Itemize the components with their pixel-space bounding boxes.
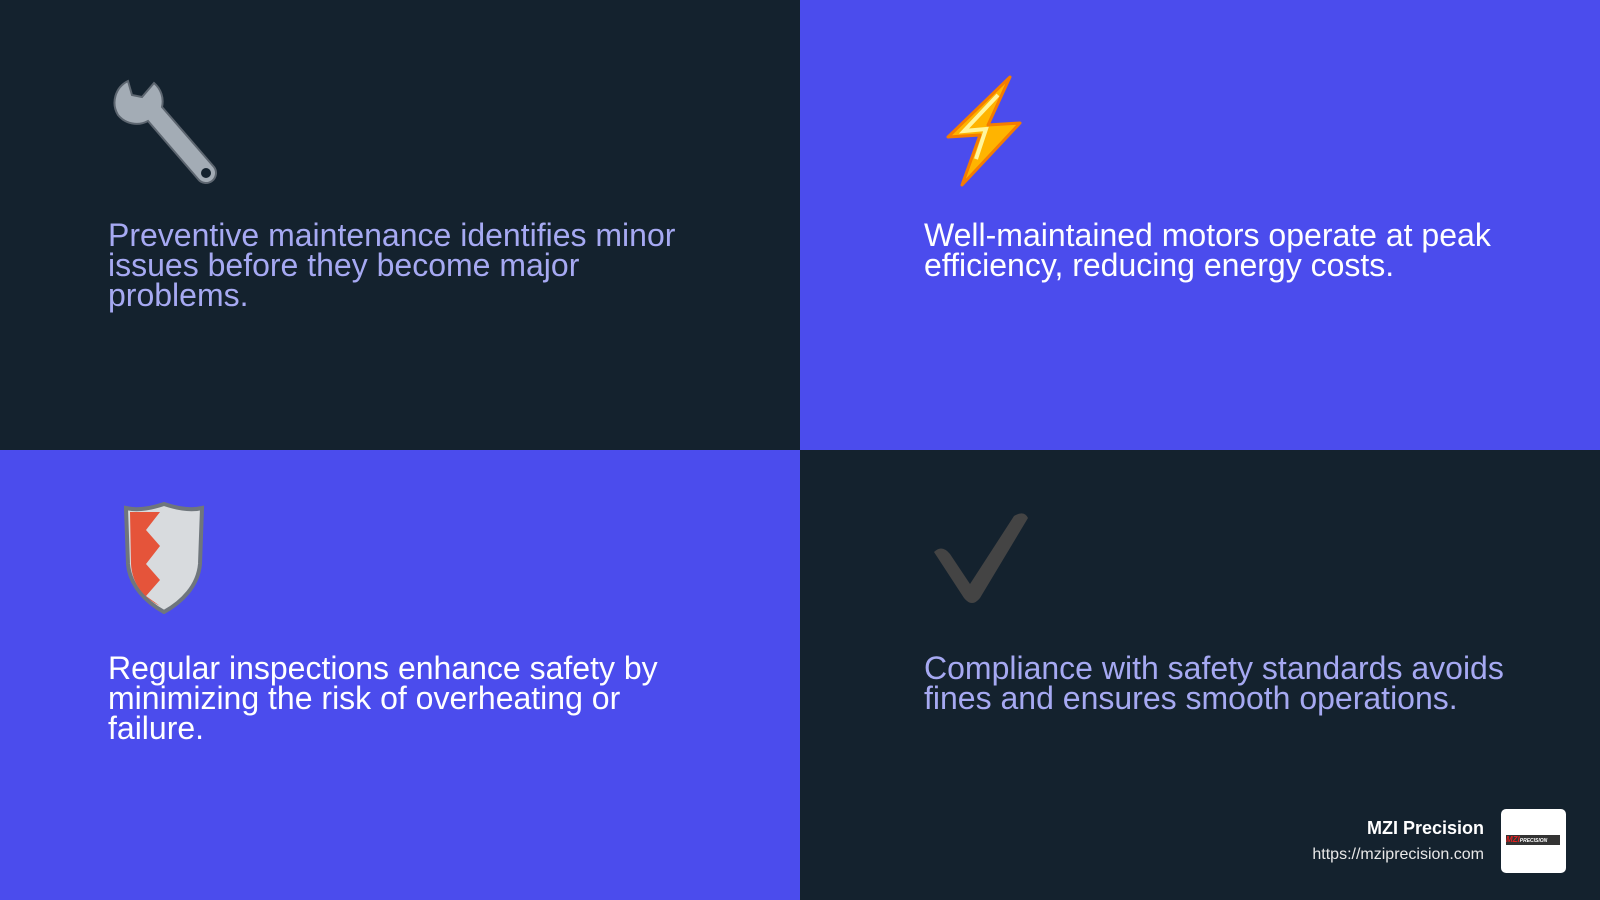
icon: wrench [114,80,217,184]
text block: Preventive maintenance identifies minor issues before they become major problems. [108,217,675,313]
brand footer [1312,809,1566,873]
text block: Regular inspections enhance safety by minimizing the risk of overheating or failure. [108,650,658,746]
panel: compliance [800,450,1600,900]
icon: lightning [946,76,1022,186]
logo [1501,809,1566,873]
text block: Compliance with safety standards avoids fines and ensures smooth operations. [924,650,1504,716]
brand name: MZI Precision [1367,818,1484,838]
text block: Well-maintained motors operate at peak efficiency, reducing energy costs. [924,217,1491,283]
logo: MZIPRECISION [1506,835,1547,844]
icon: shield [124,502,204,614]
brand url: https://mziprecision.com [1312,846,1484,863]
panel: preventive maintenance [0,0,800,450]
panel: energy efficiency [800,0,1600,450]
panel: safety [0,450,800,900]
icon: check mark [934,513,1028,603]
